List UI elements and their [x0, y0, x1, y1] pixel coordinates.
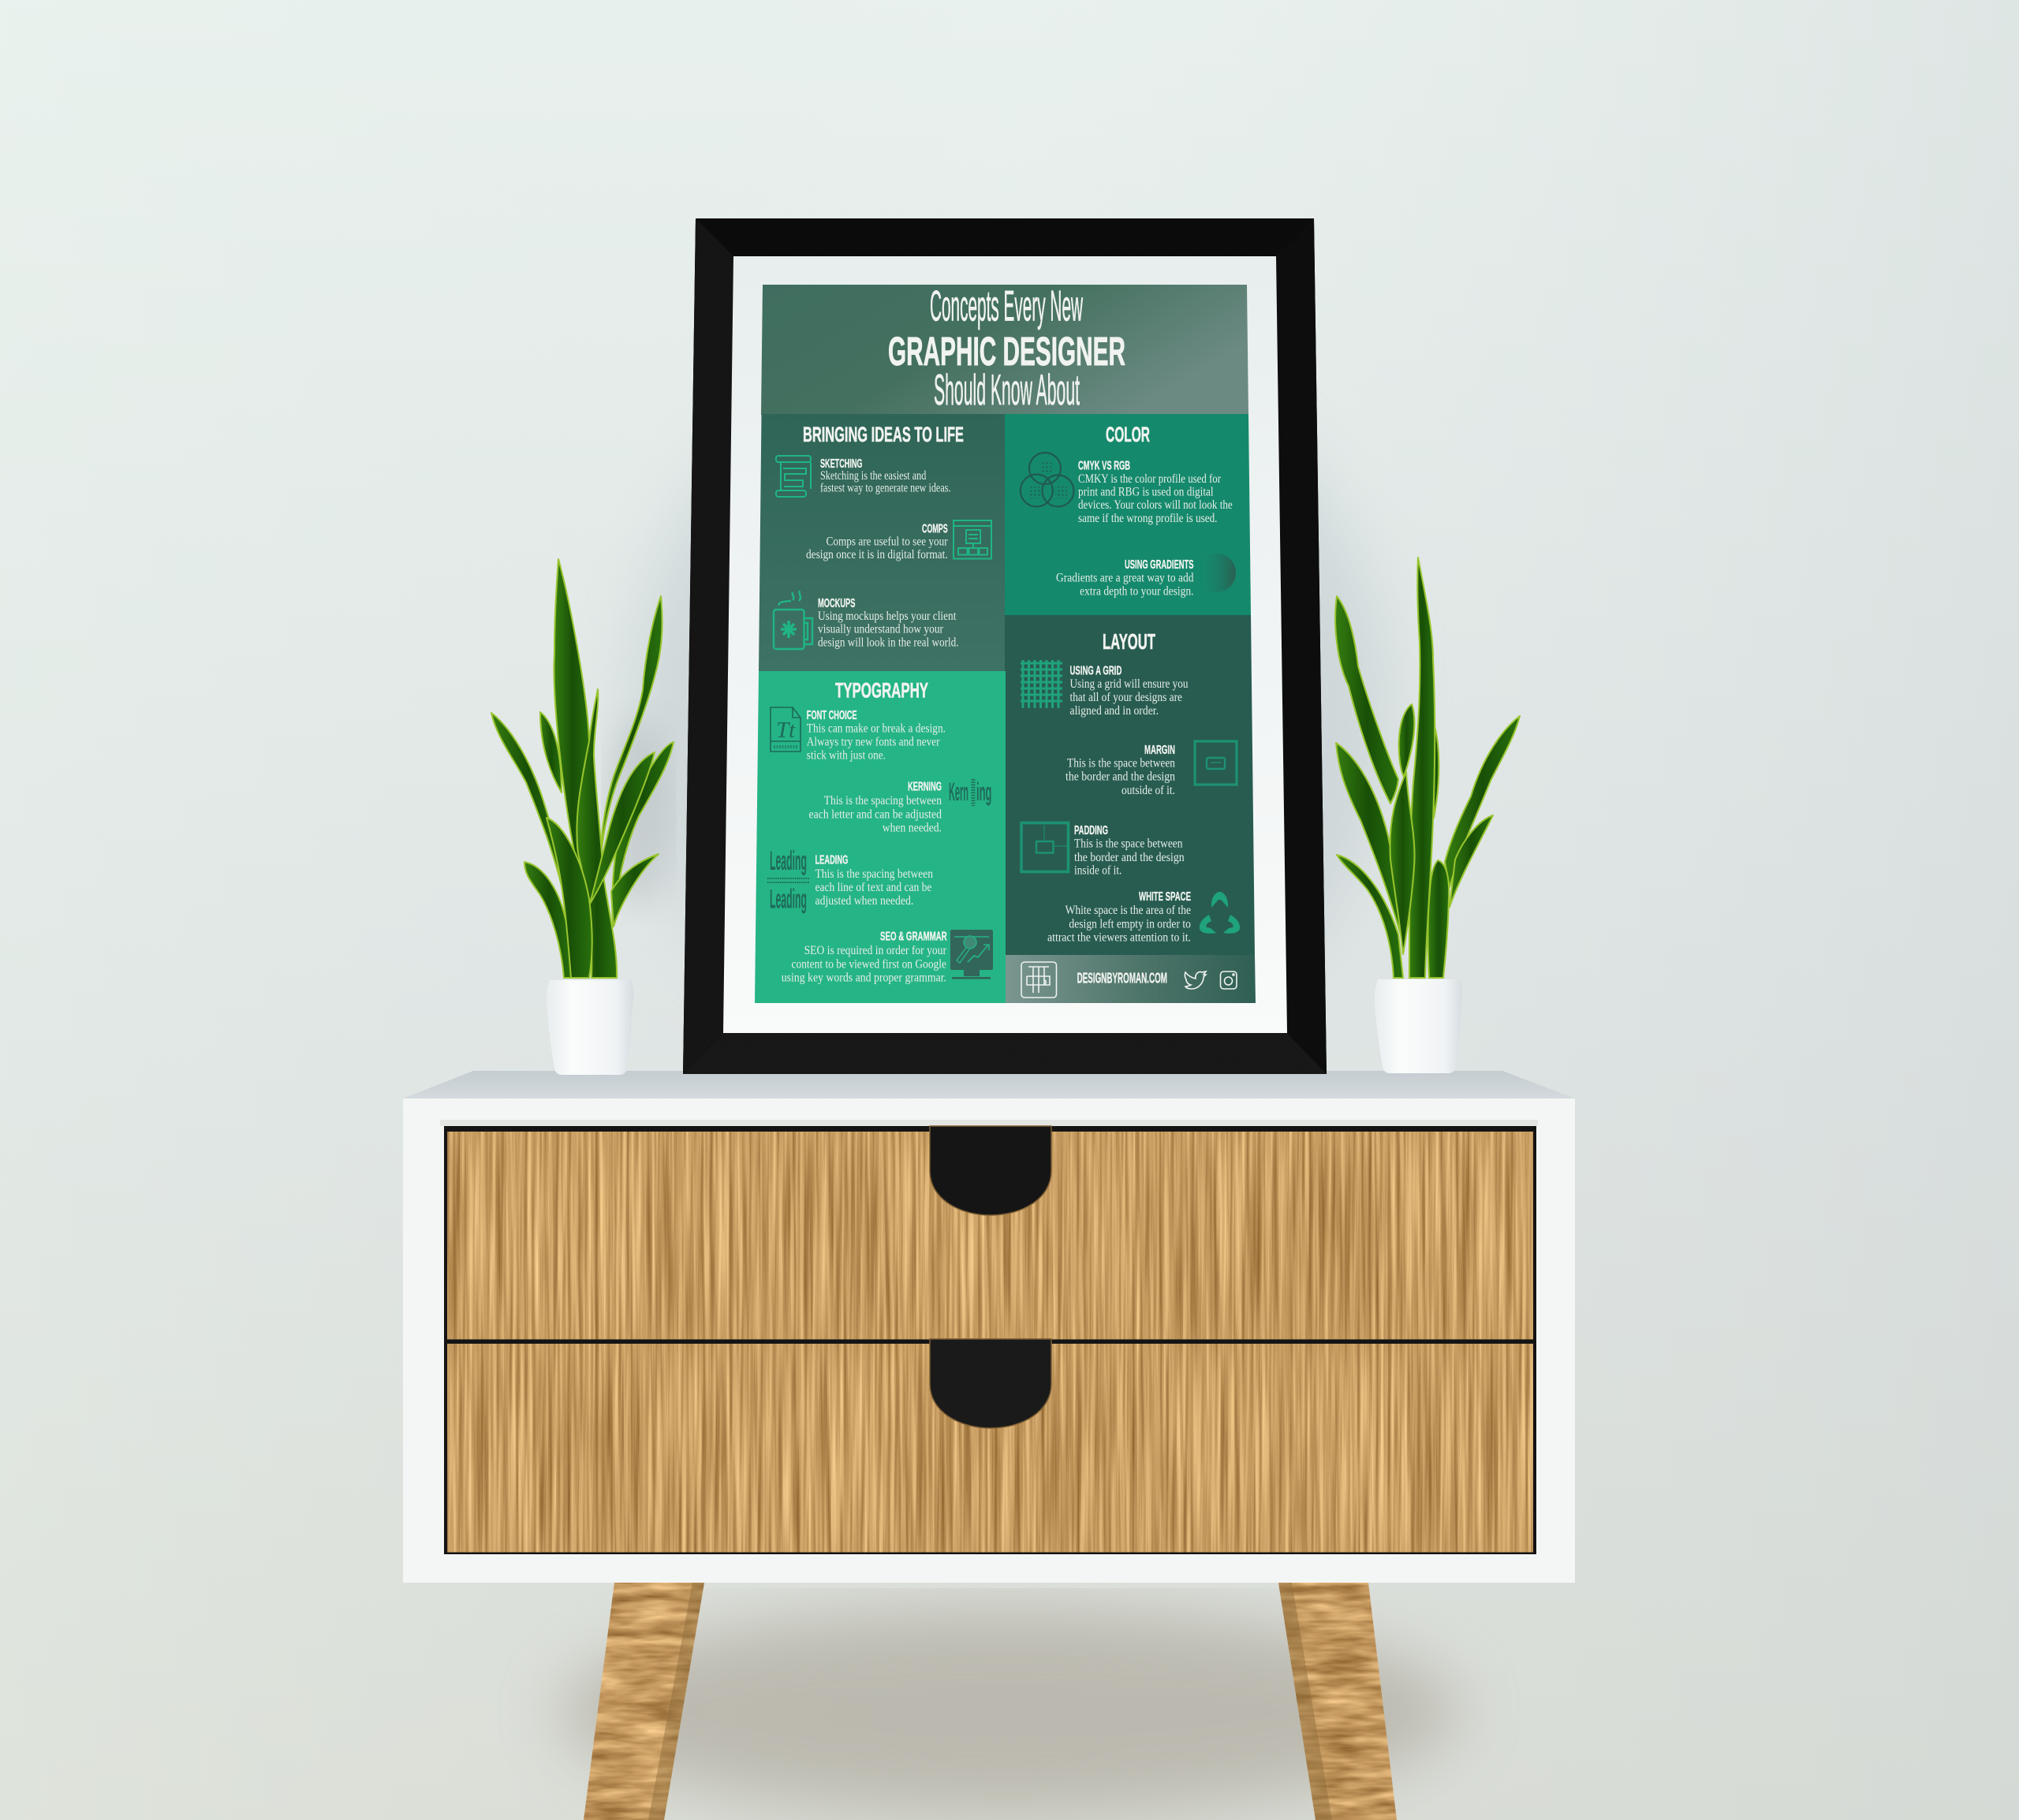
title — [888, 281, 1125, 414]
item: kerning: KERNING — [908, 781, 942, 793]
heading: BRINGING IDEAS TO LIFE — [803, 423, 964, 446]
item: seo and grammar — [782, 931, 947, 985]
cabinet top surface — [403, 1071, 1575, 1098]
panel: layout — [1005, 615, 1255, 955]
item: using a grid: USING A GRID — [1069, 664, 1121, 677]
panel: header — [761, 281, 1248, 415]
item: using gradients: Gradients are a great way to add — [1056, 572, 1194, 585]
heading: TYPOGRAPHY — [835, 679, 928, 703]
panel: bringing ideas to life — [759, 414, 1005, 671]
drawer: bottom — [447, 1344, 1533, 1552]
item: sketching — [820, 457, 951, 495]
icon: font file — [771, 707, 801, 751]
icon: leading — [767, 846, 809, 915]
item: white space: White space is the area of the — [1065, 904, 1191, 917]
icon: mockup mug — [774, 591, 812, 649]
cabinet front — [403, 1098, 1575, 1583]
item: seo and grammar: SEO is required in order for your — [804, 944, 947, 957]
item: cmyk vs rgb — [1078, 460, 1233, 525]
item: using a grid — [1069, 664, 1189, 718]
item: using a grid: Using a grid will ensure you — [1069, 677, 1189, 691]
item: sketching: SKETCHING — [820, 457, 863, 471]
icon: gradient circle — [1197, 554, 1236, 592]
panel: typography: Leading — [770, 846, 807, 876]
item: margin: outside of it. — [1121, 784, 1175, 797]
icon: margin — [1195, 741, 1237, 785]
item: font choice: FONT CHOICE — [807, 709, 857, 722]
item: seo and grammar: content to be viewed first on Google — [792, 957, 946, 972]
heading: COLOR — [1106, 423, 1150, 446]
drawer: top — [447, 1132, 1533, 1339]
item: margin: the border and the design — [1065, 770, 1175, 784]
pot — [1375, 979, 1462, 1073]
item: kerning — [809, 781, 942, 835]
item: font choice: Always try new fonts and never — [807, 736, 940, 749]
item: using gradients: USING GRADIENTS — [1125, 558, 1194, 572]
item: leading: each line of text and can be — [815, 881, 931, 894]
icon: padding — [1021, 823, 1068, 872]
icon: kerning: Kern — [949, 778, 968, 806]
item: cmyk vs rgb: print and RBG is used on digital — [1078, 486, 1214, 498]
item: cmyk vs rgb: CMKY is the color profile used for — [1078, 472, 1222, 486]
icon: twitter — [1185, 972, 1206, 989]
icon: comps wireframe — [954, 520, 991, 558]
item: mockups — [818, 597, 959, 650]
item: sketching: fastest way to generate new ideas. — [820, 481, 951, 495]
item: using gradients: extra depth to your design. — [1080, 584, 1194, 598]
panel: footer — [1006, 955, 1256, 1003]
item: seo and grammar: SEO & GRAMMAR — [880, 931, 947, 943]
item: mockups: design will look in the real world. — [818, 636, 959, 650]
icon: sketching scroll — [776, 456, 811, 497]
icon: cmyk circles — [1021, 453, 1074, 506]
item: leading: This is the spacing between — [815, 867, 933, 881]
item: comps — [806, 522, 948, 561]
panel: header: Concepts Every New — [930, 281, 1083, 330]
item: kerning: This is the spacing between — [824, 794, 942, 807]
picture frame — [683, 218, 1327, 1074]
item: margin: MARGIN — [1144, 744, 1175, 757]
plant: left — [491, 559, 674, 1075]
leaves — [491, 559, 674, 978]
item: leading: adjusted when needed. — [815, 894, 913, 908]
item: padding — [1074, 824, 1185, 878]
drawer pull: bottom — [930, 1339, 1051, 1428]
item: leading: LEADING — [815, 853, 848, 867]
website url: DESIGNBYROMAN.COM — [1077, 970, 1167, 986]
item: mockups: Using mockups helps your client — [818, 610, 957, 623]
plant: right — [1335, 558, 1520, 1073]
item: using a grid: that all of your designs are — [1069, 691, 1182, 704]
item: comps: Comps are useful to see your — [827, 535, 948, 549]
icon: seo monitor — [950, 930, 993, 979]
legs — [576, 1583, 1404, 1820]
drawer pull: top — [930, 1126, 1051, 1215]
item: mockups: MOCKUPS — [818, 597, 856, 610]
item: cmyk vs rgb: same if the wrong profile is used. — [1078, 512, 1218, 525]
title: GRAPHIC DESIGNER — [888, 329, 1125, 374]
item: white space — [1047, 890, 1191, 945]
pot — [547, 980, 633, 1075]
item: font choice: This can make or break a design. — [807, 722, 946, 736]
title: Should Know About — [934, 365, 1080, 414]
item: margin: This is the space between — [1067, 757, 1175, 770]
item: kerning: each letter and can be adjusted — [809, 807, 942, 822]
item: using a grid: aligned and in order. — [1069, 704, 1159, 718]
item: using gradients — [1056, 558, 1194, 598]
panel: typography: ing — [976, 778, 992, 806]
item: comps: design once it is in digital format. — [806, 548, 948, 561]
item: mockups: visually understand how your — [818, 623, 944, 636]
icon: white space triangle — [1200, 892, 1240, 934]
item: font choice — [807, 709, 946, 762]
icon: designbyroman logo — [1021, 962, 1057, 998]
icon: instagram — [1221, 972, 1237, 989]
item: leading — [815, 853, 933, 908]
item: white space: design left empty in order to — [1069, 917, 1191, 931]
item: white space: WHITE SPACE — [1139, 890, 1191, 904]
item: sketching: Sketching is the easiest and — [820, 469, 927, 483]
item: margin — [1065, 744, 1175, 797]
item: cmyk vs rgb: CMYK VS RGB — [1078, 460, 1130, 473]
icon: font file: Tt — [776, 718, 796, 743]
cabinet — [403, 1071, 1575, 1820]
item: padding: PADDING — [1074, 824, 1108, 837]
poster — [755, 281, 1256, 1003]
item: font choice: stick with just one. — [807, 749, 886, 762]
item: seo and grammar: using key words and proper grammar. — [782, 972, 946, 985]
item: padding: the border and the design — [1074, 851, 1185, 864]
icon: grid — [1021, 660, 1062, 708]
item: white space: attract the viewers attention to it. — [1047, 931, 1191, 945]
heading: LAYOUT — [1103, 629, 1155, 654]
panel: typography: Leading — [770, 885, 807, 915]
mat board — [723, 256, 1287, 1033]
leaves — [1335, 558, 1520, 978]
item: padding: inside of it. — [1074, 864, 1121, 878]
item: comps: COMPS — [922, 522, 948, 536]
panel: color — [1005, 414, 1251, 615]
panel: typography — [755, 671, 1006, 1003]
item: kerning: when needed. — [883, 822, 942, 835]
item: padding: This is the space between — [1074, 837, 1183, 851]
item: cmyk vs rgb: devices. Your colors will not look the — [1078, 498, 1233, 512]
